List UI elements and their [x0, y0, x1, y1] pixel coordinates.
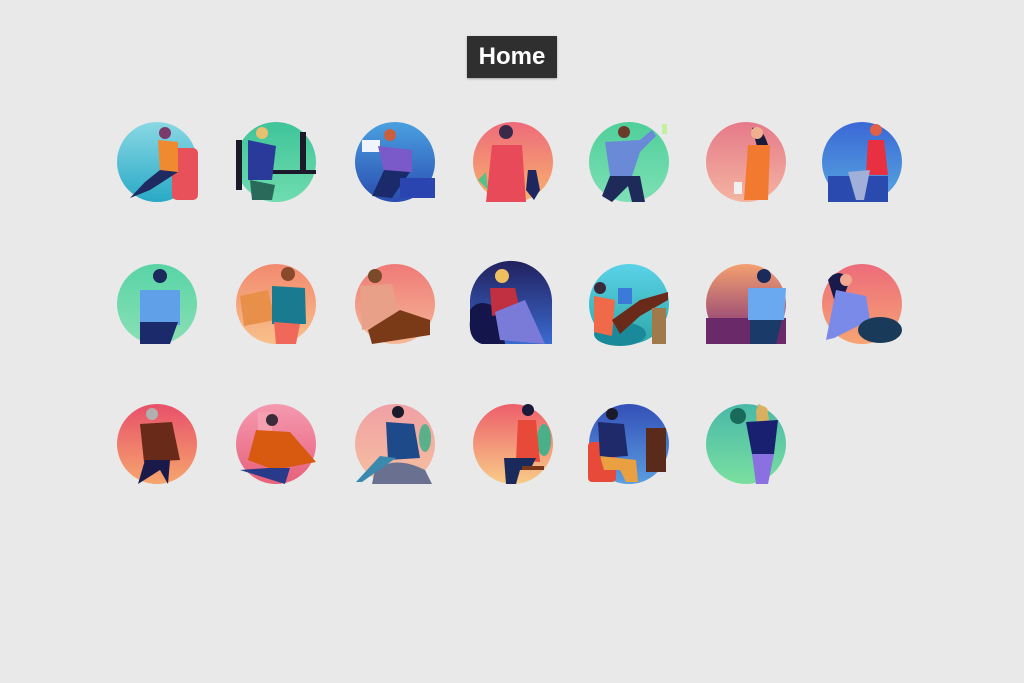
icon: bearded man with dog — [355, 404, 435, 484]
icon: woman standing — [706, 404, 786, 484]
title: Home — [479, 43, 545, 70]
icon: man with glass — [589, 122, 669, 202]
icon: man reading — [355, 122, 435, 202]
icon: man arms crossed — [117, 264, 197, 344]
title — [467, 36, 557, 78]
icon: woman on floor — [822, 264, 902, 344]
icon: man at counter — [706, 264, 786, 344]
icon: woman with cup — [706, 122, 786, 202]
icon: woman on beanbag — [470, 261, 552, 344]
icon: man with box — [236, 264, 316, 344]
icon: man with TV — [588, 404, 669, 484]
icon: woman on sofa — [822, 122, 902, 202]
icon: woman on chair — [473, 404, 553, 484]
icon: person in orange jacket — [236, 404, 316, 484]
icon: woman on phone — [117, 122, 198, 202]
icon: man at computer — [236, 122, 316, 202]
icon: man with coat — [117, 404, 197, 484]
icon: woman with vase — [473, 122, 553, 202]
icon: bearded man sitting — [355, 264, 435, 344]
icon: reading man legs up — [589, 264, 669, 346]
